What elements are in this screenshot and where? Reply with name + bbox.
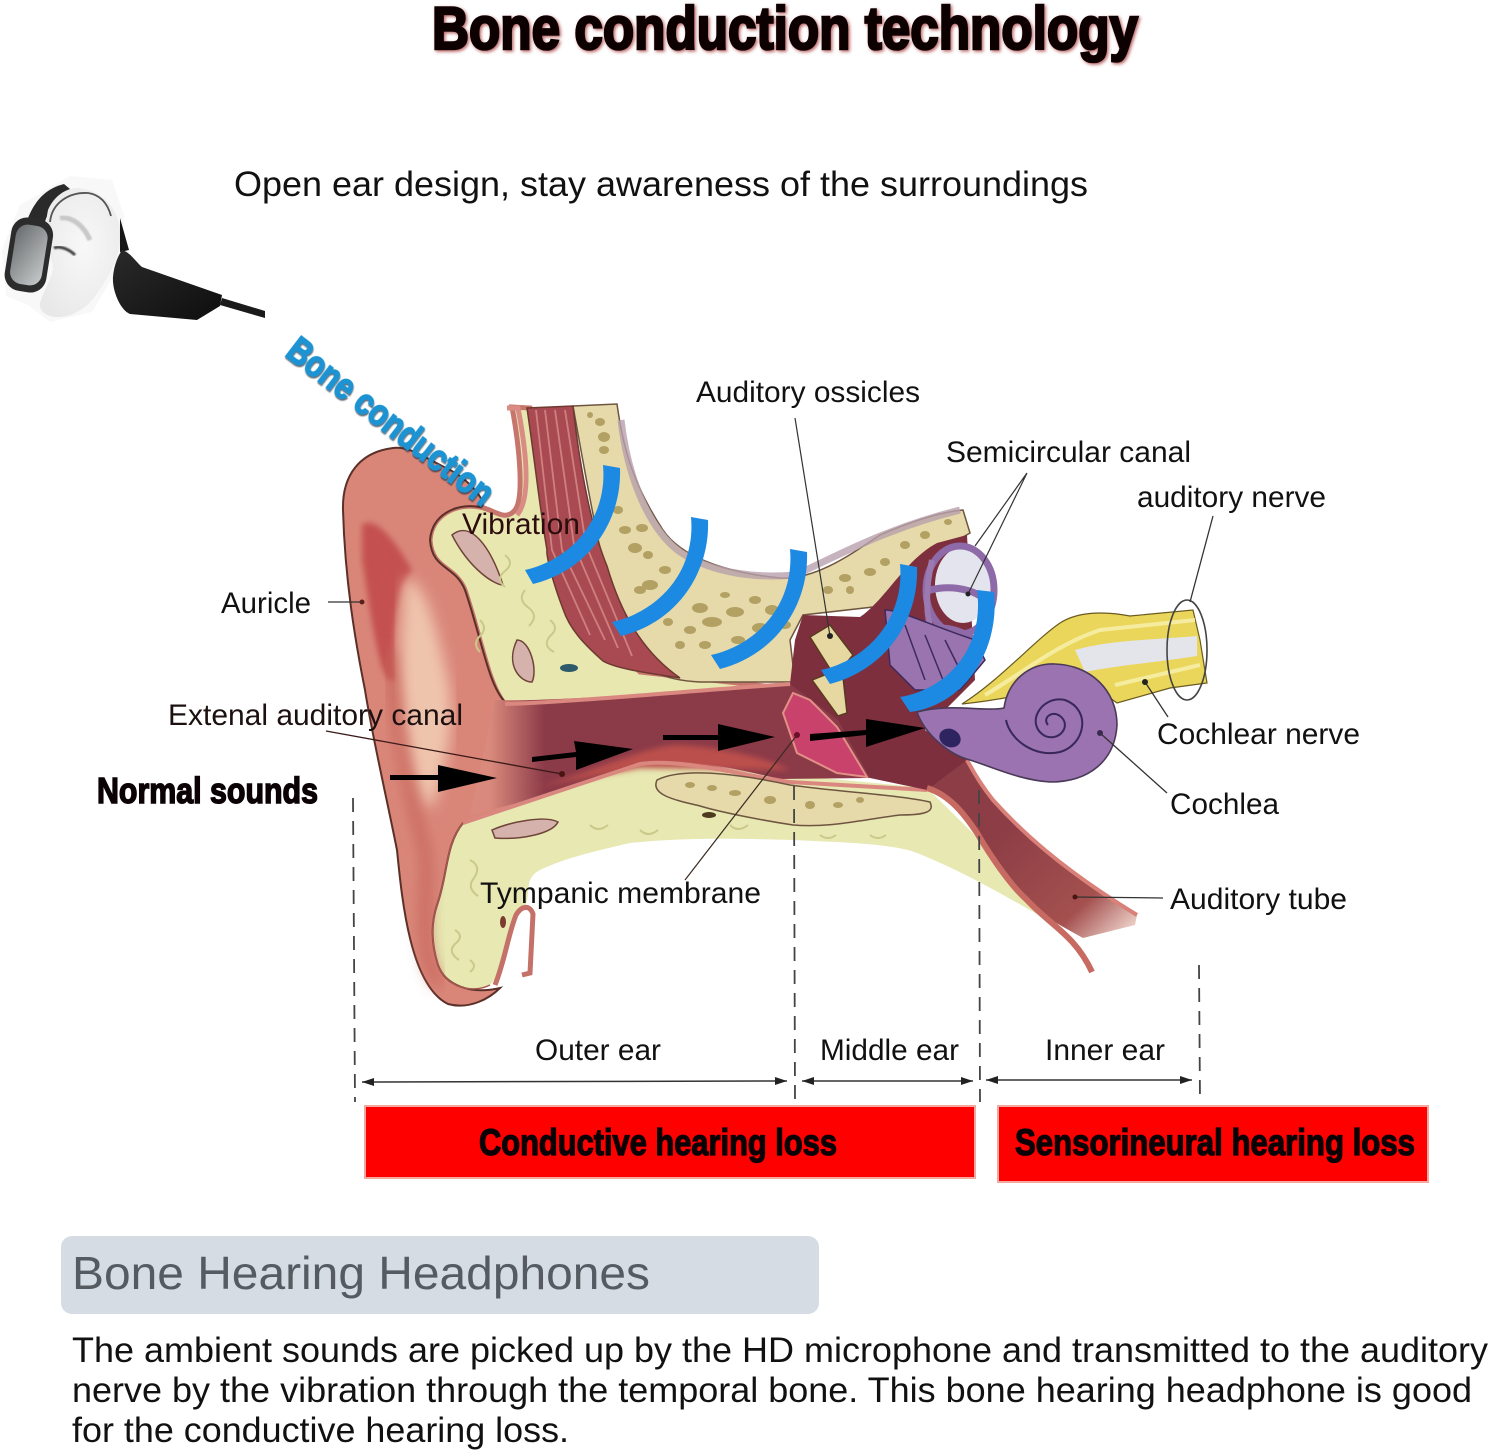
label: auditory tube [1072, 883, 1347, 916]
ear anatomy illustration [343, 404, 1207, 1006]
nerve end disc [1167, 600, 1207, 700]
panel: heading bone hearing headphones: Bone Hearing Headphones [72, 1247, 650, 1299]
label: auricle: Auricle [221, 587, 311, 620]
temporal bone spots [587, 412, 952, 649]
bone top membrane [621, 420, 960, 576]
tube upper edge [967, 760, 1137, 915]
description paragraph: for the conductive hearing loss. [72, 1411, 569, 1450]
auditory nerve [962, 610, 1207, 704]
lobe inner wall [433, 823, 490, 989]
nerve light band [1075, 636, 1197, 672]
lower bone spots [685, 782, 864, 809]
semicircular canals [915, 546, 994, 650]
tympanic membrane [783, 693, 867, 777]
auricle skin [343, 448, 640, 1006]
panel: conductive hearing loss: Conductive hearing loss [479, 1122, 837, 1163]
label: cochlea [1097, 730, 1279, 821]
upper pale tissue [430, 407, 800, 704]
vibration arc 4 [821, 564, 917, 684]
label: cochlear nerve: Cochlear nerve [1157, 718, 1360, 751]
panel: conductive hearing loss [365, 1106, 975, 1178]
dashed divider lines [353, 786, 1200, 1102]
vestibule lines [905, 625, 965, 685]
auditory tube [927, 760, 1137, 938]
label: normal sounds: Normal sounds [97, 770, 318, 811]
tube lower wall [927, 788, 1092, 972]
canal upper and lower wall [463, 684, 927, 823]
sound arrows [390, 719, 925, 792]
label: semicircular canal: Semicircular canal [946, 436, 1191, 469]
vibration arc 3 [711, 549, 807, 669]
vestibule [885, 610, 985, 690]
arrow 3 [663, 724, 775, 751]
outer ear span: Outer ear [535, 1034, 661, 1067]
label: tympanic membrane: Tympanic membrane [480, 877, 761, 910]
cochlea body [917, 664, 1117, 782]
vibration arc 1 [525, 465, 620, 584]
vibration arc 2 [612, 517, 708, 636]
auricle shading: rim [390, 650, 440, 985]
label: external auditory canal [168, 699, 565, 777]
label: vibration: Vibration [462, 508, 580, 541]
vibration arc 5 [900, 590, 995, 712]
muscle band [527, 406, 680, 678]
panel: sensorineural hearing loss: Sensorineural hearing loss [1015, 1122, 1415, 1163]
label: auditory nerve: auditory nerve [1137, 481, 1326, 514]
ear canal [470, 684, 870, 815]
arrow 4 [810, 719, 925, 747]
inner ear span [986, 1034, 1192, 1084]
pale tissue squiggles [452, 555, 886, 972]
auricle shading: dark fold [362, 523, 412, 681]
blue vibration arcs [525, 465, 995, 712]
subtitle: Open ear design, stay awareness of the surroundings [234, 165, 1088, 204]
panel: heading bone hearing headphones [61, 1236, 819, 1314]
auditory ossicles [810, 625, 853, 716]
muscle fibres [536, 410, 632, 656]
cochlea spiral [1006, 699, 1082, 753]
label: auricle [221, 587, 364, 620]
label: auditory tube: Auditory tube [1170, 883, 1347, 916]
description paragraph: The ambient sounds are picked up by the HD microphone and transmitted to the auditory [72, 1331, 1489, 1370]
description paragraph [72, 1331, 1489, 1450]
middle ear span: Middle ear [820, 1034, 959, 1067]
lower bone strip [656, 773, 931, 826]
label: cochlear nerve [1142, 679, 1360, 751]
small cartilage shapes [452, 531, 503, 585]
arrow 2 [532, 741, 633, 770]
outer ear span [362, 1034, 787, 1086]
middle ear cavity [790, 535, 993, 800]
auricle shading: light area [400, 580, 451, 810]
middle ear span [802, 1034, 973, 1085]
temporal bone [573, 404, 970, 682]
label: external auditory canal: Extenal auditory canal [168, 699, 463, 732]
label: bone conduction: Bone conduction [279, 329, 502, 514]
inner ear span: Inner ear [1045, 1034, 1165, 1067]
label: tympanic membrane [480, 732, 800, 910]
panel: sensorineural hearing loss [998, 1106, 1428, 1182]
ear section brackets [362, 1034, 1192, 1086]
oval window [936, 725, 964, 751]
skin strip above the concha [507, 408, 526, 515]
label: auditory ossicles: Auditory ossicles [696, 376, 920, 409]
soft tissue: lower pale region [433, 760, 1044, 989]
lobe fold [495, 907, 533, 985]
label: auditory nerve [1137, 481, 1326, 602]
description paragraph: nerve by the vibration through the temporal bone. This bone hearing headphone is good [72, 1371, 1472, 1410]
canal lower red layer [520, 745, 790, 790]
label: semicircular canal [946, 436, 1191, 596]
arrow 1 [390, 765, 497, 792]
label: cochlea: Cochlea [1170, 788, 1279, 821]
nerve highlights [985, 620, 1200, 695]
label: auditory ossicles [696, 376, 920, 639]
icon: bone conduction headphone on ear [2, 176, 265, 322]
